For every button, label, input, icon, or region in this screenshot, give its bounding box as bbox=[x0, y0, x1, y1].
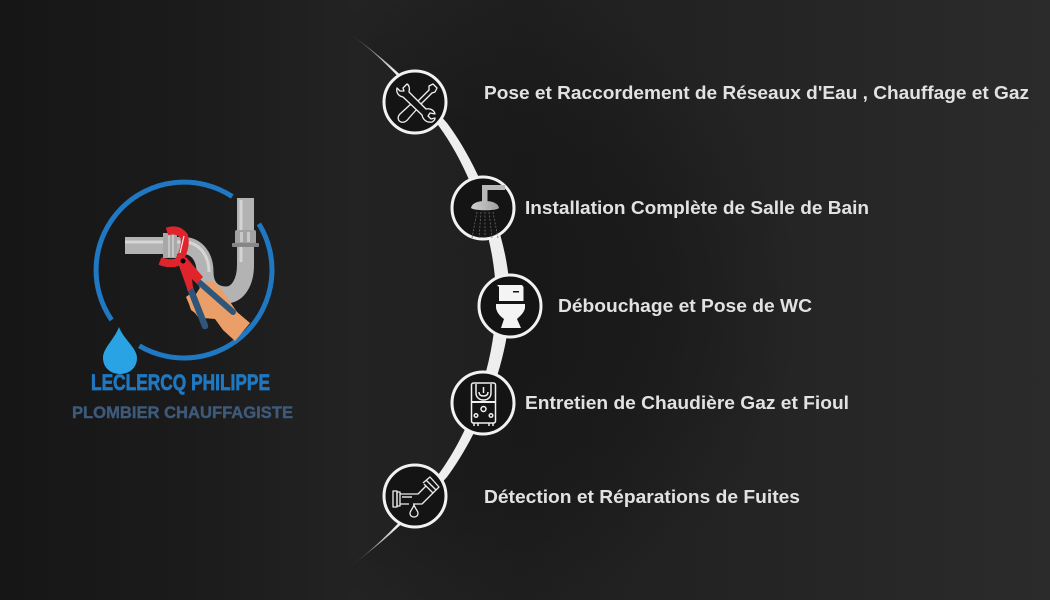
icon circle 5 bbox=[384, 465, 446, 527]
label 2: Installation Complète de Salle de Bain bbox=[525, 198, 869, 218]
logo wrench bbox=[160, 230, 233, 326]
icon: boiler bbox=[472, 383, 496, 426]
step 3 bbox=[479, 275, 812, 337]
logo hand bbox=[186, 281, 250, 341]
dark glow right of arc bbox=[160, 0, 800, 600]
icon: leaking pipe bbox=[393, 477, 439, 517]
icon: toilet bbox=[496, 285, 525, 328]
step 5 bbox=[384, 465, 800, 527]
label 1: Pose et Raccordement de Réseaux d'Eau , Chauffage et Gaz bbox=[484, 83, 1029, 103]
icon: tools bbox=[397, 84, 437, 122]
icon circle 2 bbox=[452, 177, 514, 239]
logo subtitle: PLOMBIER CHAUFFAGISTE bbox=[72, 403, 293, 422]
label 3: Débouchage et Pose de WC bbox=[558, 296, 812, 316]
logo bbox=[72, 182, 293, 422]
step 4 bbox=[452, 372, 849, 434]
icon: shower bbox=[471, 185, 505, 238]
step 1 bbox=[384, 71, 1029, 133]
logo ring bbox=[96, 182, 272, 358]
logo water drop bbox=[103, 327, 137, 374]
label 4: Entretien de Chaudière Gaz et Fioul bbox=[525, 393, 849, 413]
logo pipe bbox=[125, 198, 259, 295]
icon circle 4 bbox=[452, 372, 514, 434]
step 2 bbox=[452, 177, 869, 239]
crescent arc bbox=[345, 30, 510, 570]
logo name: LECLERCQ PHILIPPE bbox=[91, 370, 270, 395]
label 5: Détection et Réparations de Fuites bbox=[484, 487, 800, 507]
icon circle 3 bbox=[479, 275, 541, 337]
icon circle 1 bbox=[384, 71, 446, 133]
